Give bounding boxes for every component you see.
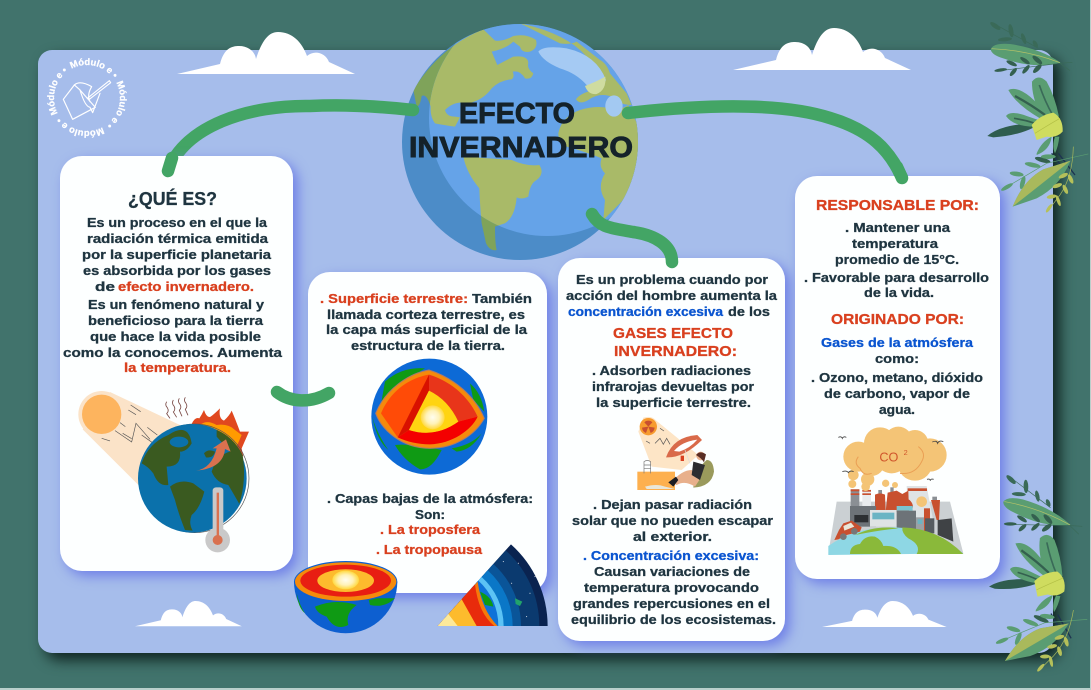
heading: gases efecto invernadero: INVERNADERO: <box>614 344 737 360</box>
connector end: responsable <box>897 167 902 178</box>
text: definicion: de <box>95 279 115 294</box>
text: dejan pasar: . Dejan pasar radiación <box>593 497 752 512</box>
cloud: top left <box>177 32 355 74</box>
illustration: sun and person <box>637 417 714 490</box>
text: definicion: como la conocemos. Aumenta <box>63 345 283 360</box>
text: definicion <box>63 215 283 375</box>
text: definicion: que hace la vida posible <box>90 329 261 344</box>
heading: responsable por: RESPONSABLE POR: <box>816 198 979 214</box>
text: concentracion excesiva <box>571 548 776 627</box>
title <box>409 98 633 164</box>
cloud: bottom left <box>135 601 242 626</box>
text: capas bajas: Son: <box>415 507 445 522</box>
text: superficie terrestre: estructura de la tierra. <box>351 338 505 353</box>
logo: Módulo e badge: Módulo e • <box>58 119 104 138</box>
text: capas bajas <box>327 491 533 557</box>
text: capas bajas: . La troposfera <box>380 522 481 537</box>
connector: globe to responsable <box>628 106 902 178</box>
title: EFECTO <box>459 98 575 130</box>
text: superficie terrestre: la capa más superficial de la <box>326 322 528 337</box>
title: INVERNADERO <box>409 132 633 164</box>
text: responsable: promedio de 15°C. <box>835 252 959 267</box>
panel: problema <box>558 214 785 641</box>
logo: Módulo e badge: Módulo e • <box>47 68 66 116</box>
cloud: bottom right <box>822 601 947 627</box>
text: originado: . Ozono, metano, dióxido <box>811 370 983 385</box>
text: problema: Es un problema cuando por <box>576 272 768 287</box>
text: originado: agua. <box>879 402 915 417</box>
text: definicion: efecto invernadero. <box>118 279 254 294</box>
text: definicion: es absorbida por los gases <box>83 263 271 278</box>
connector: globe to que es <box>168 105 413 171</box>
illustration: half earth <box>294 561 397 633</box>
illustration: factory CO2: CO <box>879 451 898 465</box>
illustration: earth layers <box>371 359 487 475</box>
text: dejan pasar <box>572 497 773 544</box>
text: definicion: Es un fenómeno natural y <box>88 297 265 312</box>
text: capas bajas: . Capas bajas de la atmósfera: <box>327 491 533 506</box>
logo: Módulo e badge: Módulo e • <box>108 80 127 128</box>
text: definicion: por la superficie planetaria <box>82 247 272 262</box>
text: responsable: . Mantener una <box>845 220 951 235</box>
illustration: factory CO2 <box>828 427 963 555</box>
text: concentracion excesiva: . Concentración excesiva: <box>583 548 759 563</box>
text: problema: de los <box>728 304 770 319</box>
heading: originado por: ORIGINADO POR: <box>831 312 964 328</box>
text: problema <box>566 272 778 319</box>
text: dejan pasar: solar que no pueden escapar <box>572 513 773 528</box>
text: definicion: Es un proceso en el que la <box>87 215 268 230</box>
text: responsable: de la vida. <box>864 285 934 300</box>
text: definicion: beneficioso para la tierra <box>88 313 264 328</box>
text: concentracion excesiva: Causan variaciones de <box>594 564 750 579</box>
text: dejan pasar: al exterior. <box>633 529 712 544</box>
heading: gases efecto invernadero <box>613 326 737 360</box>
text: problema: acción del hombre aumenta la <box>566 288 778 303</box>
text: concentracion excesiva: temperatura provocando <box>584 580 759 595</box>
leaves: top right <box>987 21 1088 213</box>
text: definicion: radiación térmica emitida <box>87 231 269 246</box>
text: originado: de carbono, vapor de <box>824 386 970 401</box>
connector: que es to superficie <box>277 392 329 400</box>
heading: gases efecto invernadero: GASES EFECTO <box>613 326 733 342</box>
text: capas bajas: . La tropopausa <box>376 542 483 557</box>
cloud: top right <box>733 28 911 70</box>
text: originado: como: <box>875 351 919 366</box>
text: responsable <box>804 220 989 300</box>
connector: globe to problema <box>592 214 672 262</box>
heading: que es: ¿QUÉ ES? <box>128 188 217 209</box>
panel: responsable <box>795 167 1000 579</box>
text: responsable: . Favorable para desarrollo <box>804 270 989 285</box>
text: superficie terrestre <box>320 291 532 353</box>
panel: que es <box>60 156 293 571</box>
text: concentracion excesiva: grandes repercusiones en el <box>573 596 770 611</box>
text: concentracion excesiva: equilibrio de los ecosistemas. <box>571 612 776 627</box>
globe <box>402 24 638 260</box>
leaves: bottom right <box>987 473 1088 678</box>
text: superficie terrestre: llamada corteza terrestre, es <box>327 307 525 322</box>
text: superficie terrestre: . Superficie terrestre: <box>320 291 468 306</box>
illustration: atmosphere wedge <box>438 544 548 626</box>
illustration: factory CO2: 2 <box>904 448 908 457</box>
connector end: que es <box>168 158 172 171</box>
text: responsable: temperatura <box>852 236 939 251</box>
panel: superficie terrestre <box>294 272 548 633</box>
text: adsorben: . Adsorben radiaciones <box>592 363 751 378</box>
text: superficie terrestre: También <box>472 291 532 306</box>
logo: Módulo e badge <box>47 58 127 138</box>
text: adsorben: infrarojas devueltas por <box>592 379 754 394</box>
text: originado <box>811 335 983 417</box>
text: originado: Gases de la atmósfera <box>821 335 974 350</box>
text: definicion: la temperatura. <box>124 360 231 375</box>
text: adsorben <box>592 363 754 410</box>
logo: Módulo e badge: Módulo e • <box>70 58 116 77</box>
illustration: earth heating <box>78 391 249 552</box>
text: adsorben: la superficie terrestre. <box>596 395 751 410</box>
text: problema: concentración excesiva <box>568 304 724 319</box>
